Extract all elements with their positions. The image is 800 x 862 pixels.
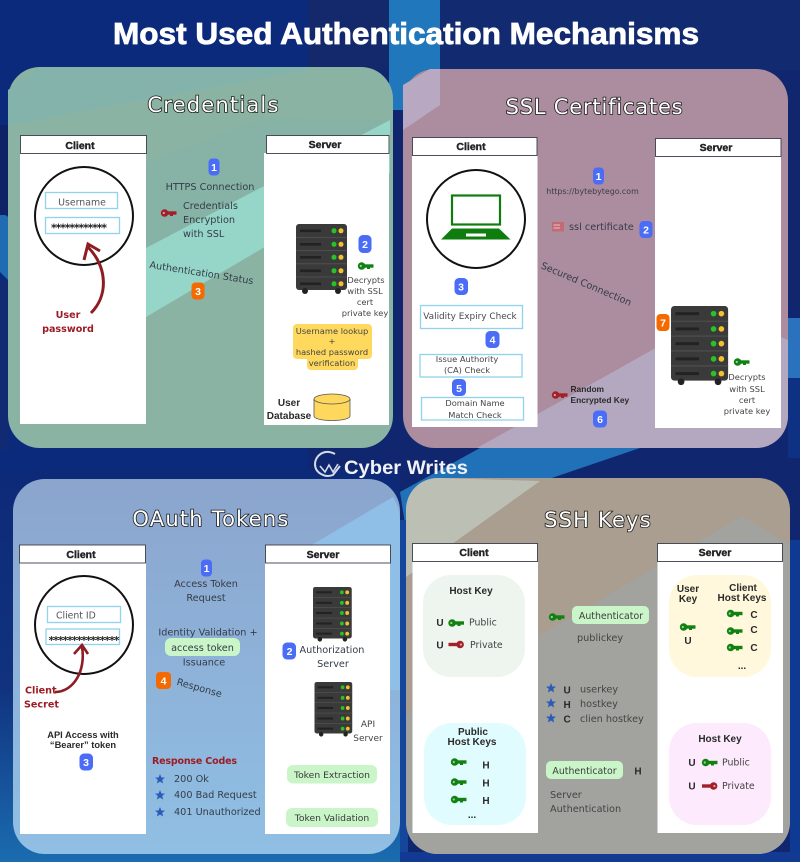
- panel: oauth tokens: [13, 479, 400, 854]
- box: public host keys: H: [482, 760, 490, 772]
- box: host key: Host Key: [449, 586, 493, 597]
- callout: lookup: +: [329, 336, 336, 346]
- client id field: Client ID: [56, 610, 96, 622]
- badge 4: 4: [161, 676, 167, 688]
- box: public host keys: [424, 723, 526, 825]
- panel: ssh server: [658, 544, 783, 833]
- badge 1: 1: [211, 162, 217, 174]
- box: validity: [420, 306, 522, 328]
- arrow: user password: [84, 244, 103, 313]
- callout: lookup: hashed password: [296, 347, 368, 357]
- heading: ssl certificates: SSL Certificates: [506, 95, 683, 119]
- text: random encrypted key: Random: [570, 384, 604, 394]
- badge 1: 1: [204, 563, 210, 575]
- pill: authenticator: Authenticator: [579, 611, 643, 622]
- password field: [46, 218, 120, 234]
- badge 6: [593, 410, 607, 428]
- box: user key and client host keys: U: [684, 636, 692, 647]
- list: response codes: 400 Bad Request: [174, 790, 257, 801]
- username field: [46, 192, 118, 208]
- box: user key and client host keys: C: [750, 610, 758, 621]
- text: url: https://bytebytego.com: [546, 187, 639, 196]
- box: issue authority: [420, 354, 522, 377]
- box: user key and client host keys: Client: [729, 583, 758, 594]
- box: host key: [423, 575, 525, 677]
- client secret field: ***************: [48, 634, 120, 647]
- decrypts text: [724, 372, 770, 416]
- text: random encrypted key: Encrypted Key: [570, 395, 629, 405]
- text: access token request: Access Token: [174, 579, 238, 590]
- box: user key and client host keys: ...: [738, 661, 746, 672]
- legend: key types: userkey: [580, 684, 618, 696]
- badge 3: [80, 754, 93, 770]
- pill: token validation: Token Validation: [294, 813, 369, 824]
- box: host key: [669, 723, 771, 825]
- box: validity: Validity Expiry Check: [423, 312, 518, 322]
- icon: api server: [314, 682, 352, 737]
- text: https connection: HTTPS Connection: [166, 182, 254, 193]
- decrypts text: with SSL: [347, 286, 383, 296]
- pill: token extraction: Token Extraction: [293, 770, 370, 781]
- box: issue authority: Issue Authority: [436, 354, 498, 364]
- badge 1: [208, 158, 220, 176]
- icon: server: [296, 224, 347, 294]
- list: response codes: [155, 774, 261, 818]
- box: domain name: [422, 398, 524, 420]
- panel: credentials client: [20, 136, 146, 424]
- box: public host keys: ...: [468, 810, 476, 821]
- box: host key: U: [688, 782, 696, 792]
- panel: ssl client: [412, 138, 538, 427]
- panel: ssl client: Client: [456, 141, 486, 153]
- label: client secret: Secret: [24, 700, 59, 710]
- box: domain name: Domain Name: [445, 398, 505, 408]
- heading: oauth tokens: OAuth Tokens: [132, 507, 290, 531]
- box: user key and client host keys: Key: [679, 594, 698, 605]
- heading: ssh keys: SSH Keys: [544, 508, 652, 532]
- list: response codes: 401 Unauthorized: [174, 807, 261, 818]
- text: authorization server: [300, 645, 364, 670]
- panel: ssh client: [412, 544, 538, 833]
- text: api server: [353, 720, 383, 744]
- panel: ssl certificates: [403, 69, 788, 448]
- icon: laptop: [441, 196, 510, 240]
- text: access token request: Request: [186, 593, 226, 604]
- badge 2: 2: [287, 646, 293, 658]
- box: issue authority: (CA) Check: [444, 365, 490, 375]
- text: server authentication: Authentication: [550, 804, 621, 815]
- callout: lookup: verification: [309, 358, 355, 368]
- text: server authentication: [550, 790, 621, 815]
- box: public host keys: H: [482, 778, 490, 790]
- arrow: client secret: [55, 645, 88, 692]
- box: public host keys: Host Keys: [448, 737, 497, 748]
- badge 4: [156, 672, 171, 689]
- pill: authenticator: [572, 606, 649, 624]
- panel: ssh server: Server: [699, 547, 731, 559]
- pill: access token: [165, 638, 240, 656]
- icon: red key: [552, 391, 568, 399]
- badge 3: [192, 282, 204, 300]
- text: response: Response: [175, 677, 223, 700]
- legend: key types: C: [564, 714, 571, 726]
- text: api access: [47, 730, 119, 750]
- box: host key: Public: [722, 758, 750, 768]
- text: credentials encryption: Credentials: [183, 201, 238, 212]
- heading: credentials: Credentials: [147, 93, 280, 117]
- badge 3: [454, 278, 468, 295]
- badge 5: [452, 379, 466, 396]
- panel: ssl server: [655, 138, 781, 428]
- text: access token request: [174, 579, 238, 604]
- text: authorization server: Server: [317, 659, 349, 670]
- badge 1: [201, 560, 212, 576]
- logo: cyber writes: [315, 452, 468, 479]
- badge 6: 6: [597, 414, 603, 426]
- panel: credentials: [8, 67, 393, 448]
- badge 3: 3: [458, 282, 464, 294]
- box: host key: Private: [722, 781, 755, 792]
- box: host key: Host Key: [698, 734, 742, 745]
- text: credentials encryption: Encryption: [183, 215, 235, 226]
- badge 2: 2: [643, 224, 649, 236]
- box: user key and client host keys: C: [750, 625, 758, 636]
- text: issuance: Issuance: [183, 658, 225, 668]
- icon: database: [314, 394, 350, 420]
- panel: oauth client: Client: [66, 549, 96, 561]
- decrypts text: private key: [724, 406, 770, 416]
- legend: key types: H: [564, 700, 571, 711]
- panel: ssh keys: [406, 478, 790, 854]
- panel: oauth server: [265, 545, 390, 834]
- panel: oauth client: [20, 545, 146, 834]
- badge 3: 3: [195, 286, 201, 298]
- legend: key types: U: [564, 686, 571, 696]
- legend: key types: clien hostkey: [580, 714, 644, 725]
- text: authorization server: Authorization: [300, 645, 364, 656]
- badge 2: [358, 235, 372, 253]
- client secret field: [46, 629, 120, 647]
- text: secured connection: Secured Connection: [539, 261, 633, 309]
- badge 7: 7: [660, 318, 666, 330]
- text: credentials encryption: [183, 201, 238, 240]
- password field: ************: [51, 222, 107, 234]
- text: random encrypted key: [570, 384, 629, 405]
- title: Most Used Authentication Mechanisms: [113, 16, 699, 51]
- label: H: H: [634, 766, 642, 778]
- box: host key: Public: [469, 618, 497, 628]
- badge 4: [486, 331, 500, 348]
- icon: key: [549, 613, 564, 621]
- panel: credentials server: [264, 136, 389, 425]
- badge 3: 3: [83, 757, 89, 769]
- icon: authorization server: [313, 587, 352, 642]
- text: api access: API Access with: [47, 730, 119, 740]
- panel: oauth server: Server: [307, 549, 339, 561]
- text: server authentication: Server: [550, 790, 582, 801]
- callout: lookup: [293, 324, 372, 370]
- text: identity validation: Identity Validation +: [158, 628, 258, 638]
- pill: authenticator: Authenticator: [552, 766, 617, 777]
- list: response codes: 200 Ok: [174, 774, 209, 785]
- text: api server: API: [361, 720, 375, 730]
- label: user password: password: [42, 324, 94, 335]
- badge 2: 2: [362, 239, 368, 251]
- box: host key: U: [436, 618, 444, 629]
- label: user database: Database: [267, 411, 312, 422]
- box: user key and client host keys: C: [750, 643, 758, 654]
- panel: ssl server: Server: [700, 142, 732, 154]
- text: response codes: Response Codes: [152, 756, 237, 767]
- label: user database: User: [278, 398, 300, 409]
- pill: authenticator: [546, 761, 623, 779]
- logo: cyber writes: Cyber Writes: [344, 458, 468, 479]
- badge 2: [282, 642, 296, 660]
- panel: ssh client: Client: [459, 547, 489, 559]
- box: public host keys: H: [482, 796, 490, 807]
- decrypts text: cert: [739, 395, 756, 405]
- box: host key: U: [688, 758, 696, 769]
- box: domain name: Match Check: [448, 410, 502, 420]
- box: host key: U: [436, 640, 444, 652]
- icon: red key: [161, 209, 176, 217]
- legend: key types: hostkey: [580, 699, 618, 710]
- text: api access: “Bearer” token: [50, 740, 116, 750]
- decrypts text: private key: [342, 308, 388, 318]
- badge 1: 1: [596, 171, 602, 183]
- badge 5: 5: [456, 383, 462, 395]
- decrypts text: Decrypts: [347, 275, 385, 285]
- text: ssl certificate: ssl certificate: [569, 222, 634, 233]
- text: api server: Server: [353, 734, 383, 744]
- box: public host keys: Public: [458, 727, 488, 738]
- username field: Username: [58, 198, 106, 208]
- pill: access token: access token: [171, 643, 234, 654]
- badge 1: [593, 168, 604, 184]
- label: client secret: Client: [25, 686, 57, 696]
- label: user password: User: [56, 310, 81, 321]
- icon: key: [358, 262, 374, 270]
- text: publickey: publickey: [577, 633, 623, 644]
- badge 2: [640, 221, 652, 238]
- pill: token extraction: [287, 765, 377, 784]
- decrypts text: with SSL: [729, 384, 765, 394]
- box: user key and client host keys: Host Keys: [718, 593, 767, 604]
- box: user key and client host keys: User: [677, 584, 699, 595]
- panel: credentials server: Server: [309, 139, 341, 151]
- label: user database: [267, 398, 312, 422]
- box: user key and client host keys: [669, 575, 771, 677]
- box: host key: Private: [470, 640, 503, 651]
- client id field: [48, 606, 120, 622]
- label: user password: [42, 310, 94, 335]
- decrypts text: [342, 275, 388, 318]
- icon: server: [671, 306, 728, 385]
- pill: token validation: [286, 808, 378, 827]
- badge 4: 4: [490, 334, 496, 346]
- decrypts text: Decrypts: [728, 372, 766, 382]
- text: authentication status: Authentication Status: [149, 260, 254, 287]
- decrypts text: cert: [357, 297, 374, 307]
- legend: key types: [546, 683, 644, 726]
- label: client secret: [24, 686, 59, 710]
- panel: credentials client: Client: [65, 140, 95, 152]
- text: credentials encryption: with SSL: [183, 229, 225, 240]
- badge 7: [656, 314, 670, 331]
- icon: key: [734, 358, 750, 366]
- icon: certificate: [552, 222, 564, 232]
- callout: lookup: Username lookup: [296, 326, 368, 336]
